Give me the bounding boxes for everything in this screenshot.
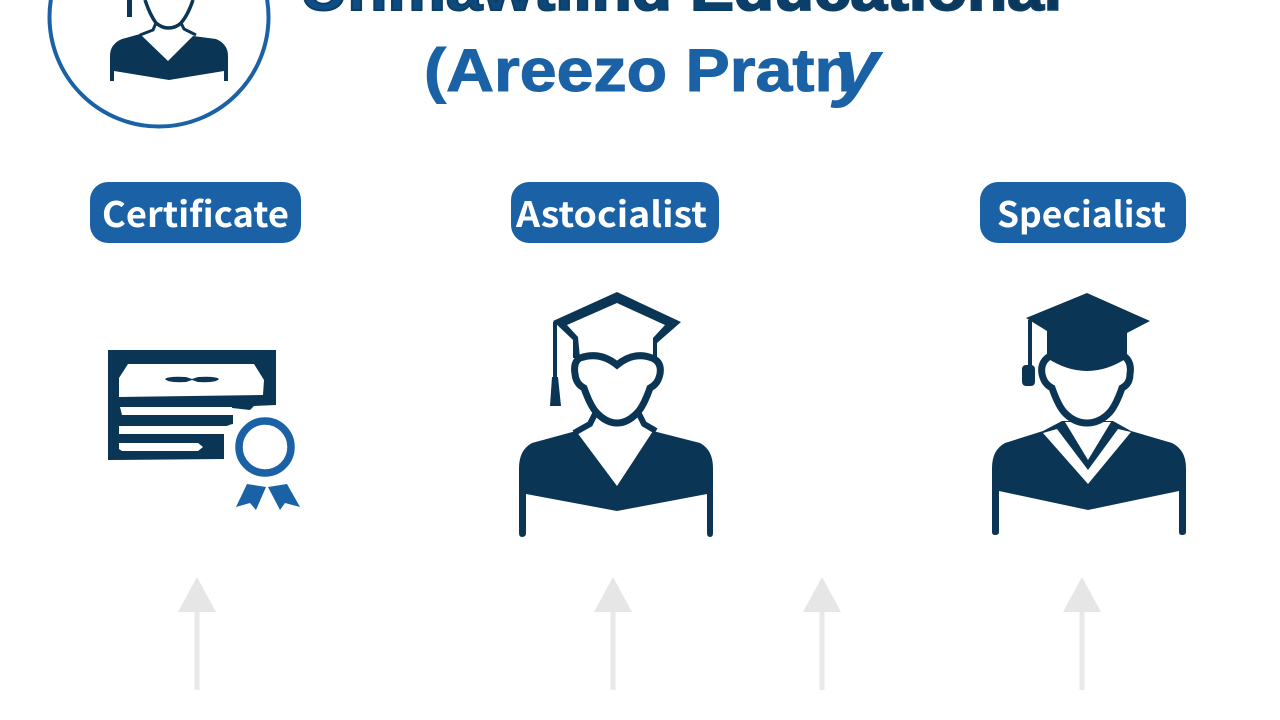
label pill: Specialist: Specialist [997, 187, 1166, 238]
arrow 4 [1063, 577, 1101, 690]
icon: graduate with solid cap [992, 293, 1186, 535]
arrow 2 [594, 577, 632, 690]
label pill: Certificate: Certificate [102, 187, 289, 238]
arrow 1 [178, 577, 216, 690]
title: (Areezo Pratn [424, 37, 855, 104]
icon: certificate with ribbon [108, 350, 300, 510]
label pill: Astocialist: Astocialist [515, 187, 707, 238]
icon: graduate with outlined cap [519, 292, 713, 537]
label pill: Specialist [980, 182, 1186, 243]
title: y [830, 24, 884, 109]
arrow 3 [803, 577, 841, 690]
avatar icon: graduate in circle [50, 0, 268, 126]
title [300, 0, 1062, 109]
